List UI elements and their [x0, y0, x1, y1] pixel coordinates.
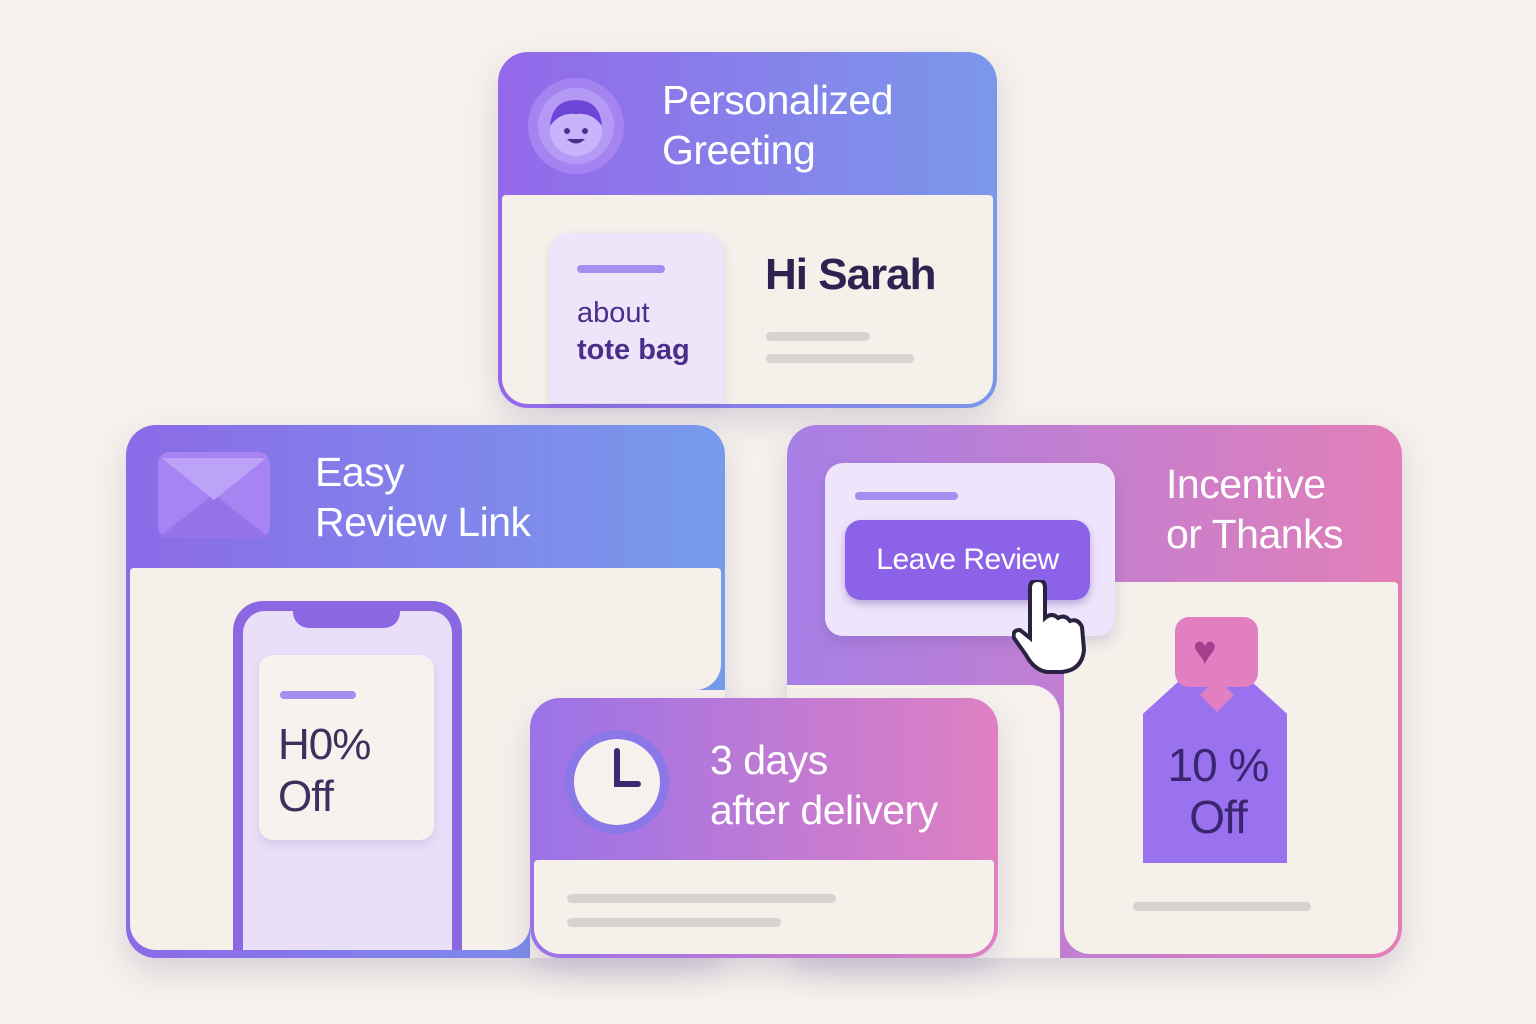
- icon: hand cursor: [1012, 580, 1086, 674]
- panel: easy review link: [126, 425, 725, 958]
- phone mockup: [233, 601, 462, 961]
- text: 10 % Off: [1168, 739, 1268, 843]
- heading: easy review link: [315, 449, 531, 545]
- heading: incentive or thanks: [1166, 461, 1343, 557]
- panel body: review link: [130, 568, 721, 690]
- icon: clock: [565, 730, 669, 834]
- panel body: greeting: [502, 195, 993, 404]
- icon: price tag with heart: ♥: [1193, 629, 1217, 673]
- icon: avatar face: [528, 78, 624, 174]
- heading: personalized greeting: Greeting: [662, 127, 815, 173]
- panel body: timing: [534, 860, 994, 954]
- text: Hi Sarah: Hi Sarah: [765, 250, 936, 299]
- review card with button: [825, 463, 1115, 636]
- note card: about tote bag: about: [577, 297, 650, 329]
- button: Leave Review: [845, 520, 1090, 600]
- icon: price tag with heart: [1143, 617, 1287, 863]
- coupon card: H0% Off: H0%: [278, 720, 370, 769]
- button: Leave Review: Leave Review: [876, 543, 1059, 576]
- panel: personalized greeting: [498, 52, 997, 408]
- heading: personalized greeting: Personalized: [662, 77, 893, 123]
- heading: easy review link: Review Link: [315, 499, 531, 545]
- heading: 3 days after delivery: after delivery: [710, 787, 938, 833]
- note card: about tote bag: [550, 233, 724, 403]
- heading: 3 days after delivery: [710, 737, 938, 833]
- panel: 3 days after delivery: [530, 698, 998, 958]
- coupon card: H0% Off: Off: [278, 772, 333, 821]
- note card: about tote bag: tote bag: [577, 334, 690, 366]
- panel body: incentive: [1064, 582, 1398, 954]
- heading: 3 days after delivery: 3 days: [710, 737, 828, 783]
- heading: easy review link: Easy: [315, 449, 404, 495]
- icon: envelope: [158, 452, 270, 538]
- coupon card: H0% Off: [259, 655, 434, 840]
- heading: incentive or thanks: or Thanks: [1166, 511, 1343, 557]
- panel: incentive or thanks: [787, 425, 1402, 958]
- heading: incentive or thanks: Incentive: [1166, 461, 1326, 507]
- heading: personalized greeting: [662, 77, 893, 173]
- text: 10 % Off: 10 %: [1168, 739, 1268, 791]
- text: 10 % Off: Off: [1189, 791, 1247, 843]
